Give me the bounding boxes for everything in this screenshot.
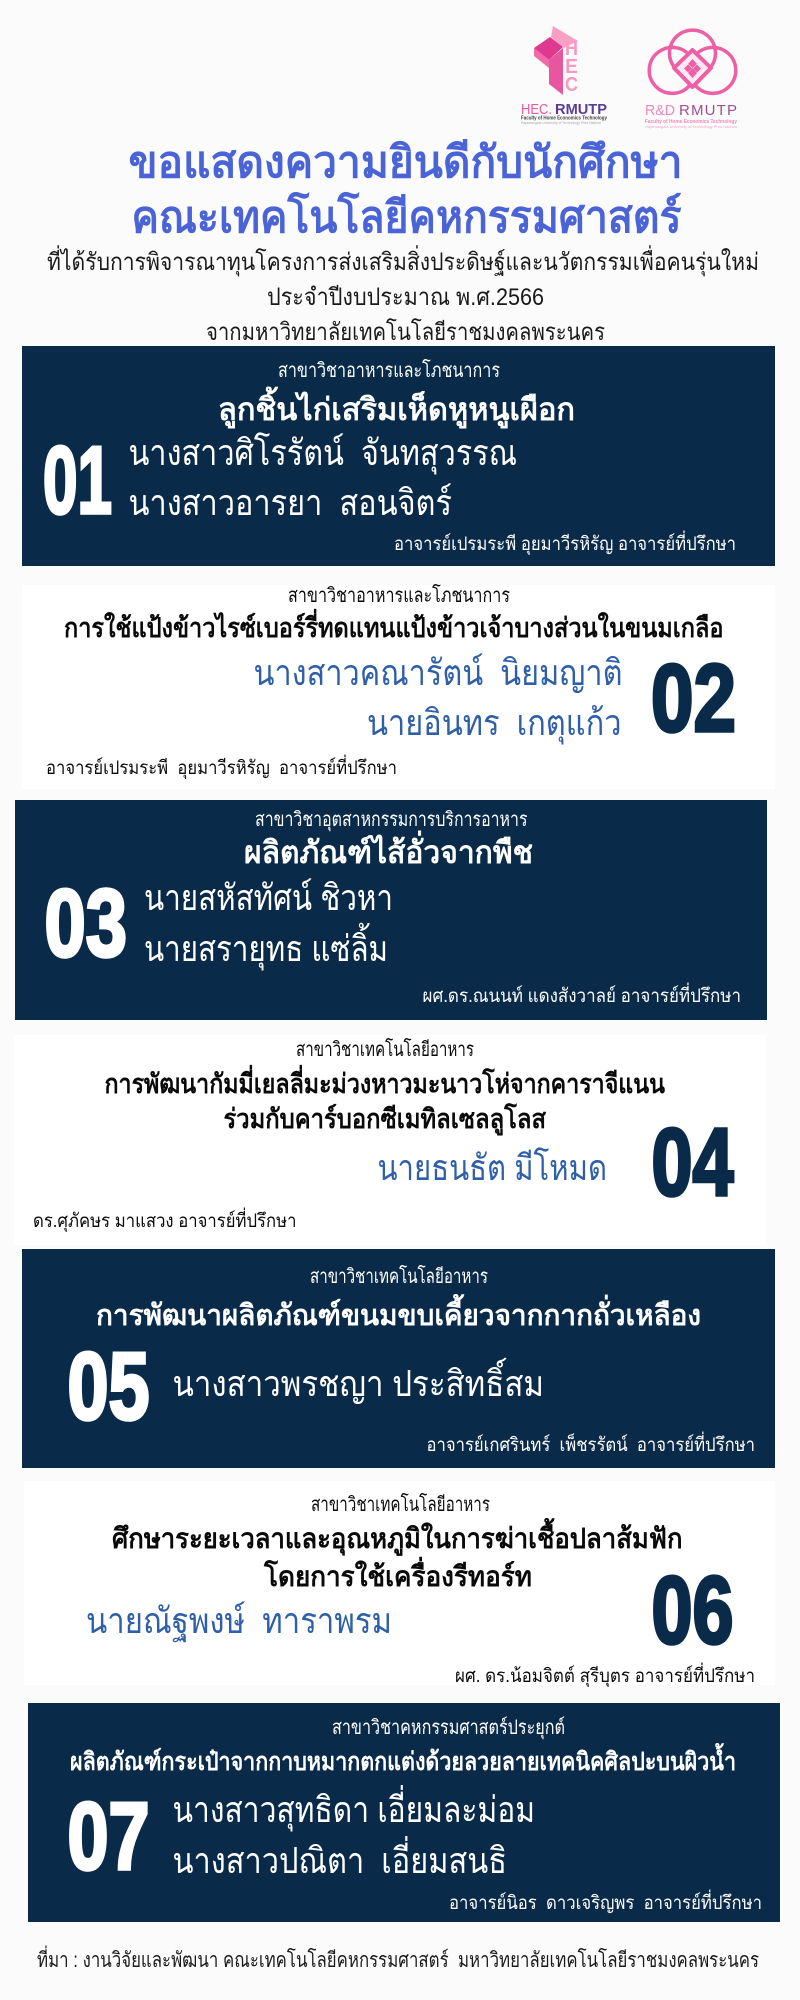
department 04: สาขาวิชาเทคโนโลยีอาหาร xyxy=(296,1038,474,1061)
number 06: 06 xyxy=(652,1557,734,1664)
advisor 05: อาจารย์เกศรินทร์ เพ็ชรรัตน์ อาจารย์ที่ปรึกษา xyxy=(426,1431,755,1456)
logo: HEC RMUTP: E xyxy=(565,56,578,78)
students 07: นางสาวสุทธิดา เอี่ยมละม่อม xyxy=(172,1785,535,1832)
student 06: นายณัฐพงษ์ ทาราพรม xyxy=(86,1600,392,1643)
students 03 xyxy=(144,877,393,971)
students 02: นายอินทร เกตุแก้ว xyxy=(367,702,622,745)
project title 04 xyxy=(104,1064,665,1136)
department 01: สาขาวิชาอาหารและโภชนาการ xyxy=(278,359,500,382)
logo: R&D RMUTP: Faculty of Home Economics Technology xyxy=(645,119,737,125)
panel: project 04 xyxy=(14,1035,766,1245)
subtitle: จากมหาวิทยาลัยเทคโนโลยีราชมงคลพระนคร xyxy=(206,318,605,346)
number 02: 02 xyxy=(651,645,736,752)
panel: project 07 xyxy=(28,1703,780,1922)
students 02: นางสาวคณารัตน์ นิยมญาติ xyxy=(254,652,622,693)
advisor 06: ผศ. ดร.น้อมจิตต์ สุรีบุตร อาจารย์ที่ปรึกษา xyxy=(455,1662,755,1688)
logo: R&D RMUTP: Rajamangala University of Technology Phra Nakhon xyxy=(645,124,737,129)
subtitle: ประจำปีงบประมาณ พ.ศ.2566 xyxy=(267,284,544,311)
number 03: 03 xyxy=(44,870,127,977)
logo: HEC RMUTP xyxy=(521,26,607,125)
project title 06: โดยการใช้เครื่องรีทอร์ท xyxy=(263,1556,532,1592)
student 04: นายธนธัต มีโหมด xyxy=(378,1147,607,1188)
panel: project 03 xyxy=(15,800,767,1020)
title: คณะเทคโนโลยีคหกรรมศาสตร์ xyxy=(132,190,682,242)
project title 05: การพัฒนาผลิตภัณฑ์ขนมขบเคี้ยวจากกากถั่วเหลือง xyxy=(96,1293,701,1332)
students 01: นางสาวศิโรรัตน์ จันทสุวรรณ xyxy=(128,432,517,475)
students 03: นายสหัสทัศน์ ชิวหา xyxy=(144,877,393,918)
department 07: สาขาวิชาคหกรรมศาสตร์ประยุกต์ xyxy=(332,1716,565,1740)
project title 04: ร่วมกับคาร์บอกซีเมทิลเซลลูโลส xyxy=(224,1102,546,1136)
logo: R&D RMUTP: RMUTP xyxy=(679,102,737,119)
students 01: นางสาวอารยา สอนจิตร์ xyxy=(128,482,452,523)
logo: HEC RMUTP: Rajamangala University of Technology Phra Nakhon xyxy=(521,120,601,125)
logo: HEC RMUTP: RMUTP xyxy=(555,101,607,118)
logo: R&D RMUTP: R&D xyxy=(645,102,675,119)
department 02: สาขาวิชาอาหารและโภชนาการ xyxy=(288,584,510,607)
title: ขอแสดงความยินดีกับนักศึกษา xyxy=(128,138,682,187)
project title 04: การพัฒนากัมมี่เยลลี่มะม่วงหาวมะนาวโห่จากคาราจีแนน xyxy=(104,1064,665,1099)
students 07 xyxy=(172,1785,535,1881)
advisor 07: อาจารย์นิอร ดาวเจริญพร อาจารย์ที่ปรึกษา xyxy=(449,1889,762,1914)
logo: HEC RMUTP: HEC. xyxy=(521,101,552,118)
department 03: สาขาวิชาอุตสาหกรรมการบริการอาหาร xyxy=(255,809,528,832)
project title 06: ศึกษาระยะเวลาและอุณหภูมิในการฆ่าเชื้อปลาส้มฟัก xyxy=(112,1517,682,1556)
student 05: นางสาวพรชญา ประสิทธิ์สม xyxy=(172,1357,544,1404)
advisor 02: อาจารย์เปรมระพี อุยมาวีรหิรัญ อาจารย์ที่ปรึกษา xyxy=(46,754,397,780)
advisor 03: ผศ.ดร.ณนนท์ แดงสังวาลย์ อาจารย์ที่ปรึกษา xyxy=(422,982,741,1007)
logo: HEC RMUTP: Faculty of Home Economics Technology xyxy=(521,116,607,122)
advisor 01: อาจารย์เปรมระพี อุยมาวีรหิรัญ อาจารย์ที่ปรึกษา xyxy=(394,530,736,556)
panel: project 02 xyxy=(22,584,775,789)
project title 02: การใช้แป้งข้าวไรซ์เบอร์รี่ทดแทนแป้งข้าวเจ้าบางส่วนในขนมเกลือ xyxy=(64,608,724,643)
department 06: สาขาวิชาเทคโนโลยีอาหาร xyxy=(311,1493,490,1516)
students 07: นางสาวปณิตา เอี่ยมสนธิ xyxy=(172,1836,507,1881)
number 07: 07 xyxy=(68,1783,150,1890)
project title 06 xyxy=(112,1517,682,1592)
number 01: 01 xyxy=(43,427,112,534)
panel: project 05 xyxy=(22,1249,775,1468)
subtitle xyxy=(47,245,759,346)
students 02 xyxy=(254,652,622,745)
logo: HEC RMUTP: H xyxy=(565,38,578,60)
advisor 04: ดร.ศุภัคษร มาแสวง อาจารย์ที่ปรึกษา xyxy=(33,1207,296,1233)
number 05: 05 xyxy=(68,1333,150,1440)
panel: project 01 xyxy=(22,346,775,566)
project title 03: ผลิตภัณฑ์ไส้อั่วจากพืช xyxy=(244,830,533,870)
logo: R&D RMUTP xyxy=(645,30,737,129)
title xyxy=(128,138,682,242)
students 01 xyxy=(128,432,517,523)
logo: HEC RMUTP: C xyxy=(565,74,578,96)
number 04: 04 xyxy=(652,1109,734,1216)
project title 01: ลูกชิ้นไก่เสริมเห็ดหูหนูเผือก xyxy=(218,386,575,429)
panel: project 06 xyxy=(24,1481,775,1688)
students 03: นายสรายุทธ แซ่ลิ้ม xyxy=(144,922,388,971)
department 05: สาขาวิชาเทคโนโลยีอาหาร xyxy=(310,1265,488,1288)
